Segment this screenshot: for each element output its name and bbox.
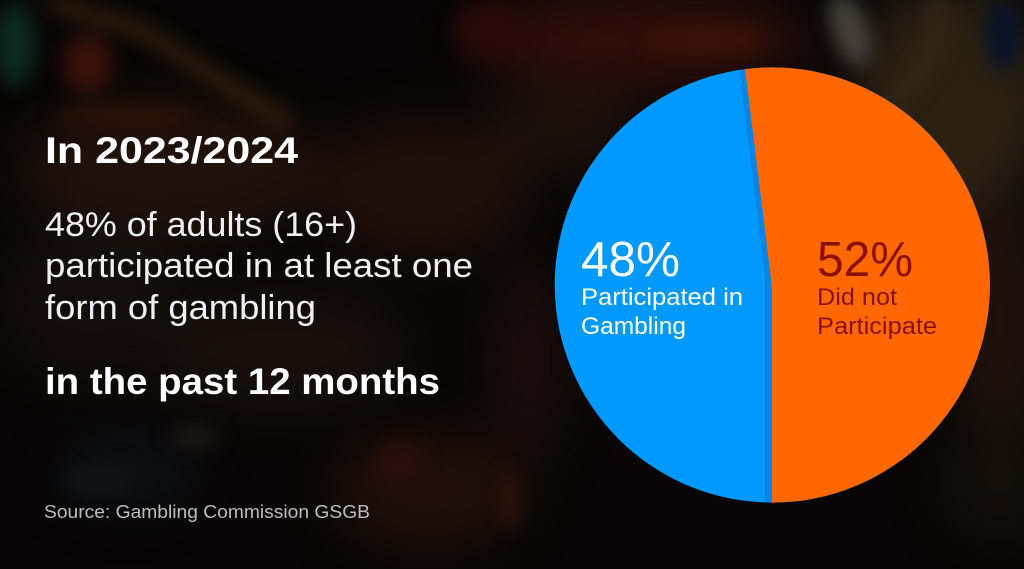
text block: statistic: [45, 206, 473, 327]
text block: statistic: participated in at least one: [45, 247, 473, 285]
label: 52% did not participate: 52%: [817, 233, 913, 287]
slice: 48% participated: [555, 67, 990, 503]
heading: time period: in the past 12 months: [45, 361, 440, 402]
label: 52% did not participate: Did not: [817, 284, 897, 311]
heading: year: In 2023/2024: [45, 130, 298, 171]
text block: statistic: form of gambling: [45, 289, 316, 327]
label: 48% participated in gambling: 48%: [581, 233, 680, 287]
label: 48% participated in gambling: Participated in: [581, 284, 743, 311]
text block: statistic: 48% of adults (16+): [45, 206, 357, 244]
pie chart: [555, 60, 1010, 510]
label: 52% did not participate: Participate: [817, 313, 937, 340]
slice: 52% did not participate: [745, 67, 990, 503]
label: 48% participated in gambling: [581, 233, 743, 340]
label: 52% did not participate: [817, 233, 937, 340]
source note: Source: Gambling Commission GSGB: [44, 501, 370, 522]
slice shadow band: [738, 60, 772, 510]
label: 48% participated in gambling: Gambling: [581, 313, 686, 340]
